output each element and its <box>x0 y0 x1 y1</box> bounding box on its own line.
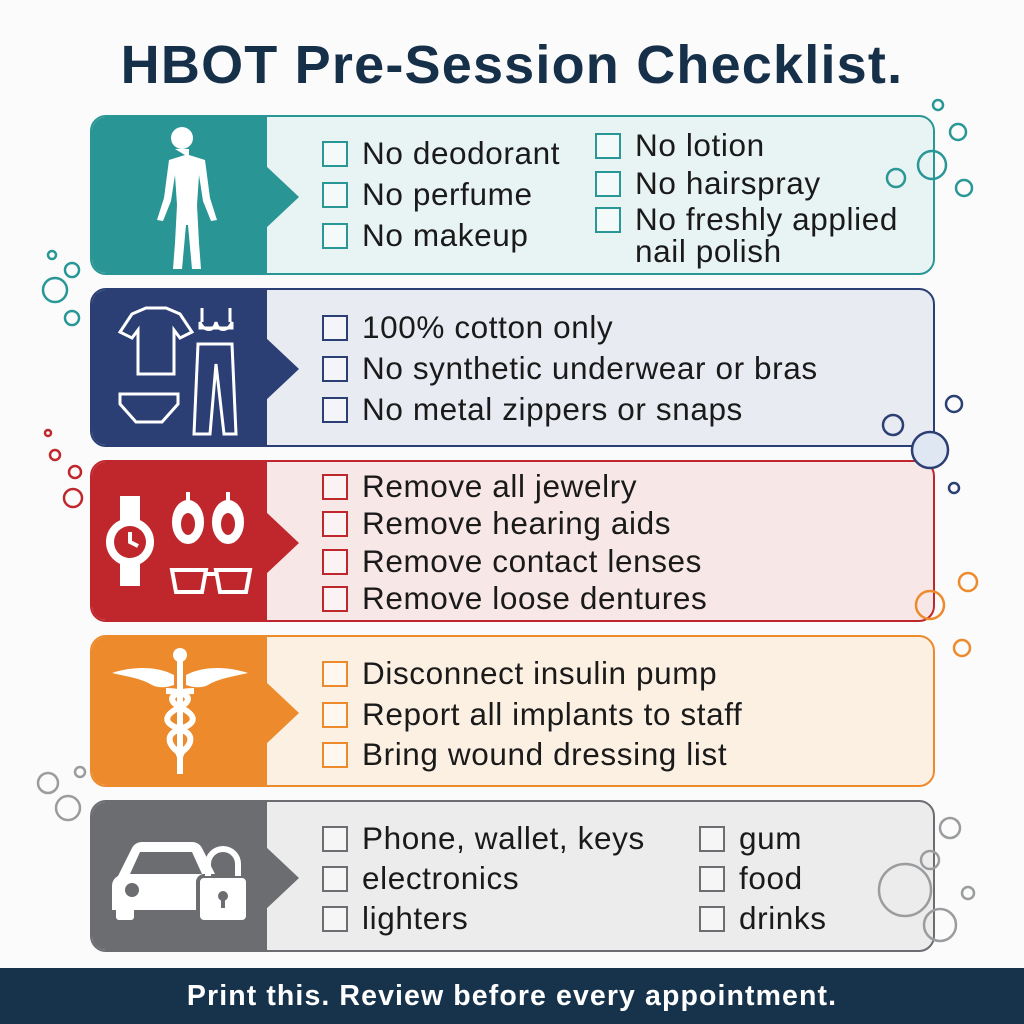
panel: body products: No freshly applied <box>635 201 898 237</box>
panel: prohibited items <box>90 800 935 952</box>
panel: medical: Report all implants to staff <box>362 696 742 732</box>
panel: accessories: Remove loose dentures <box>362 580 707 616</box>
panel: body products: No makeup <box>362 217 528 253</box>
panel: prohibited items: electronics <box>362 860 519 896</box>
checklist: Disconnect insulin pump <box>362 655 717 691</box>
icon block: watch earrings glasses <box>92 462 267 620</box>
panel: prohibited items: lighters <box>362 900 468 936</box>
checklist: Remove all jewelry <box>362 468 637 504</box>
panel: body products: No hairspray <box>635 165 821 201</box>
panel: body products: nail polish <box>635 233 782 269</box>
panel: body products <box>90 115 935 275</box>
panel: medical: Bring wound dressing list <box>362 736 727 772</box>
panel: clothing: No metal zippers or snaps <box>362 391 743 427</box>
panel: clothing <box>90 288 935 447</box>
panel: medical <box>90 635 935 787</box>
panel: accessories: Remove contact lenses <box>362 543 702 579</box>
panel: clothing: No synthetic underwear or bras <box>362 350 818 386</box>
checklist: No deodorant <box>362 135 560 171</box>
footer: Print this. Review before every appointment. <box>187 980 837 1012</box>
icon block: caduceus <box>92 637 267 785</box>
panel: prohibited items: food <box>739 860 803 896</box>
icon block: car and lock <box>92 802 267 950</box>
title: HBOT Pre-Session Checklist. <box>121 35 903 95</box>
panel: prohibited items: drinks <box>739 900 827 936</box>
panel: body products: No perfume <box>362 176 533 212</box>
footer <box>0 968 1024 1024</box>
panel: body products: No lotion <box>635 127 765 163</box>
panel: prohibited items: gum <box>739 820 802 856</box>
panel: accessories <box>90 460 935 622</box>
panel: accessories: Remove hearing aids <box>362 505 671 541</box>
checklist: Phone, wallet, keys <box>362 820 645 856</box>
icon block: clothing <box>92 290 267 445</box>
icon block: body <box>92 117 267 273</box>
checklist: 100% cotton only <box>362 309 613 345</box>
